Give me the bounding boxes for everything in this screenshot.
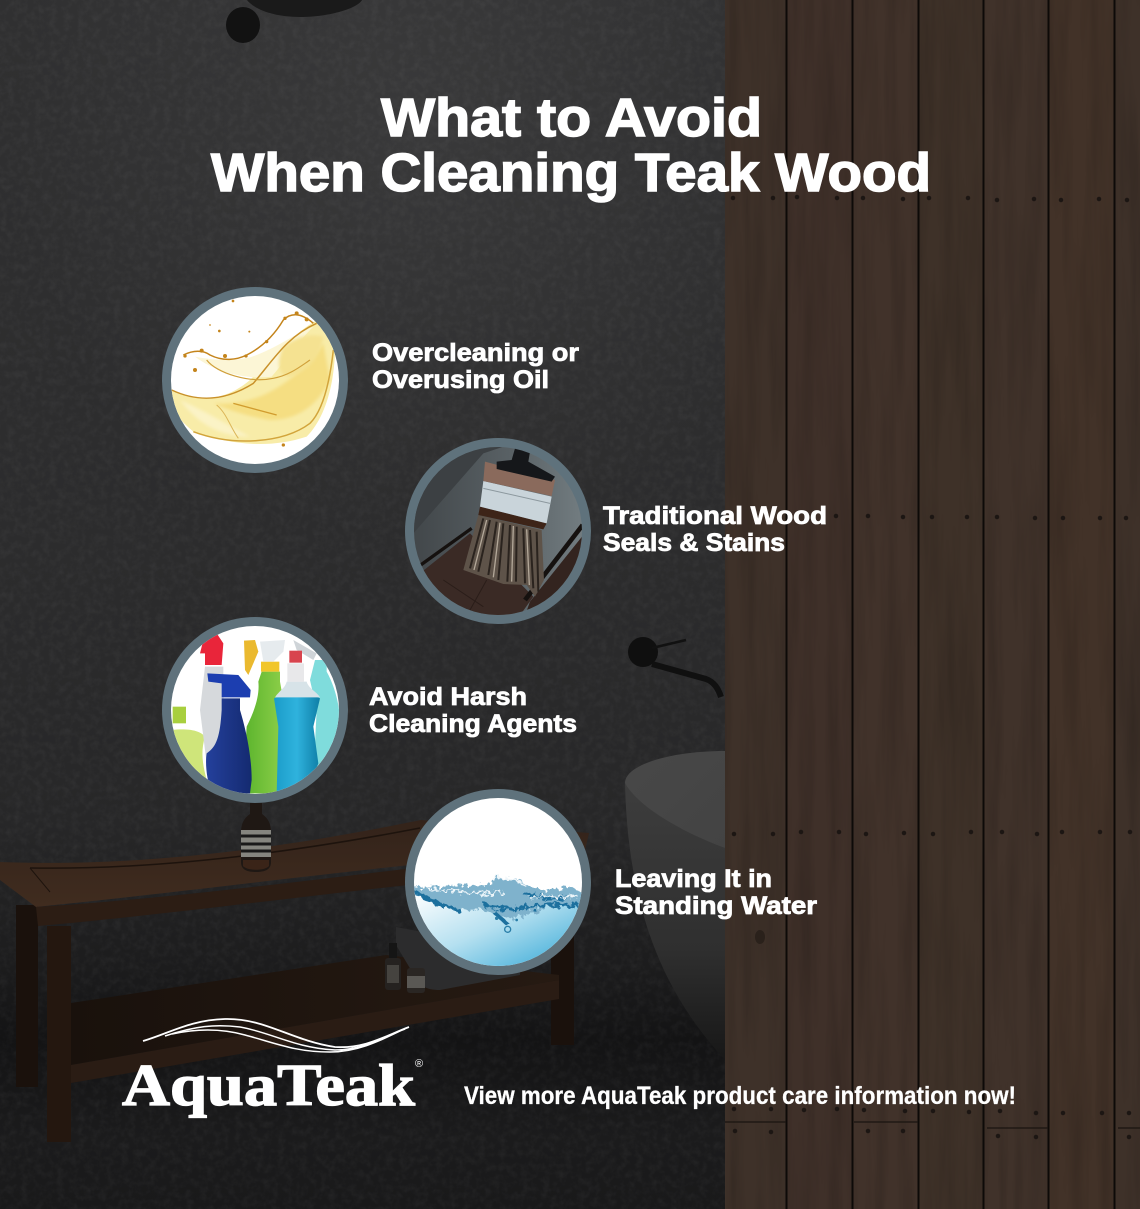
item 2: paint brush circle	[405, 438, 591, 624]
bench top	[0, 820, 589, 926]
nail holes	[733, 197, 1130, 1137]
title	[211, 88, 931, 203]
title: When Cleaning Teak Wood	[211, 143, 931, 203]
bench lower shelf	[71, 955, 559, 1083]
logo wave swoosh	[143, 1019, 409, 1052]
plank gaps	[786, 0, 1114, 1209]
deck boards	[413, 447, 583, 620]
bench back legs	[16, 905, 574, 1087]
item 2 label: Seals & Stains	[603, 529, 785, 557]
item 3 label: Cleaning Agents	[369, 710, 577, 738]
title: What to Avoid	[381, 88, 762, 148]
bathtub	[625, 751, 725, 1060]
call to action: View more AquaTeak product care information now!	[464, 1082, 1016, 1110]
AquaTeak logo: AquaTeak	[122, 1052, 415, 1118]
item 2 label	[603, 502, 827, 557]
shower head	[226, 0, 362, 43]
item 1 label: Overcleaning or	[372, 339, 579, 367]
AquaTeak logo	[122, 1019, 423, 1118]
shelf bottles and box	[385, 927, 520, 993]
item 1: oil circle	[162, 287, 348, 473]
aqua bottle	[310, 660, 340, 777]
AquaTeak logo: ®	[415, 1058, 423, 1070]
item 1 label	[372, 339, 579, 394]
item 4 label: Standing Water	[615, 892, 817, 920]
lime bottle	[172, 706, 206, 778]
gray sprayer cap	[293, 640, 317, 660]
item 3 label: Avoid Harsh	[369, 683, 527, 711]
item 4 label: Leaving It in	[615, 865, 772, 893]
navy bottle	[206, 673, 252, 793]
teak bench	[0, 820, 589, 1142]
bench front leg	[47, 926, 71, 1142]
wood plank wall	[725, 0, 1140, 1209]
item 2 label: Traditional Wood	[603, 502, 827, 530]
blue bottle	[274, 651, 320, 793]
item 4 label	[615, 865, 817, 920]
plank seams	[725, 1122, 1140, 1128]
item 1 label: Overusing Oil	[372, 366, 549, 394]
oil splash	[168, 300, 335, 447]
water splash	[413, 877, 583, 932]
white bottle with red trigger	[200, 634, 224, 758]
green bottle	[244, 640, 285, 793]
item 3 label	[369, 683, 577, 738]
wood knot	[755, 930, 765, 944]
background: concrete wall	[0, 0, 725, 1209]
bench bottle	[241, 803, 271, 872]
item 4: water circle	[405, 789, 591, 975]
faucet	[628, 637, 721, 697]
brush	[463, 448, 555, 597]
item 3: cleaning bottles circle	[162, 617, 348, 803]
